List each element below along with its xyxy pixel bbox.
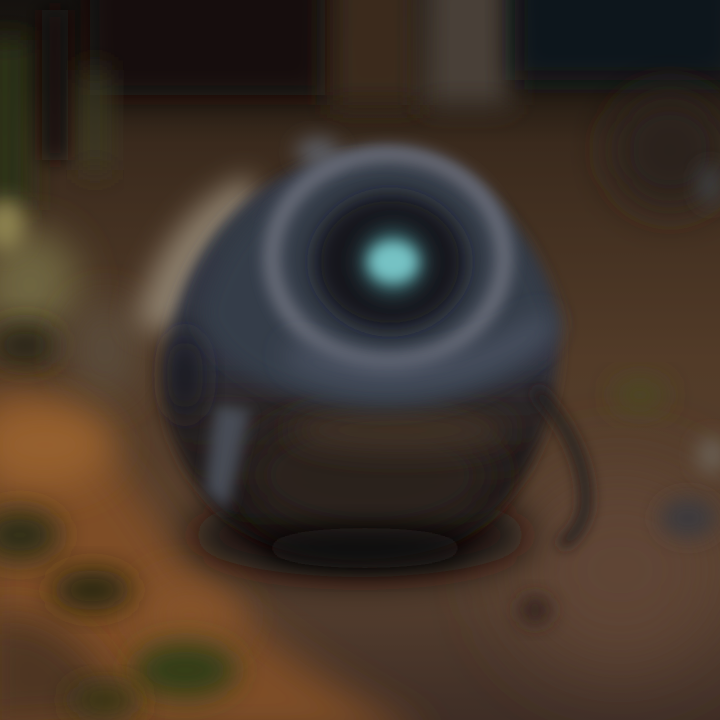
device: leg left xyxy=(205,405,250,510)
device: lower lid highlight xyxy=(290,322,548,376)
device: round body xyxy=(164,155,558,568)
device: shadow xyxy=(190,493,530,577)
device: outer ring xyxy=(272,154,504,362)
device: dark lens ring xyxy=(314,194,466,330)
device: leg right xyxy=(535,390,586,545)
device: cyan light xyxy=(359,228,427,296)
device: cream back rim xyxy=(135,175,270,340)
pebbles on right xyxy=(519,165,720,624)
device: dark left side xyxy=(167,330,203,420)
green patches xyxy=(0,380,666,716)
device: blue-grey lid xyxy=(200,138,558,408)
foliage: left edge xyxy=(0,10,140,400)
orange soil strip xyxy=(0,394,430,720)
